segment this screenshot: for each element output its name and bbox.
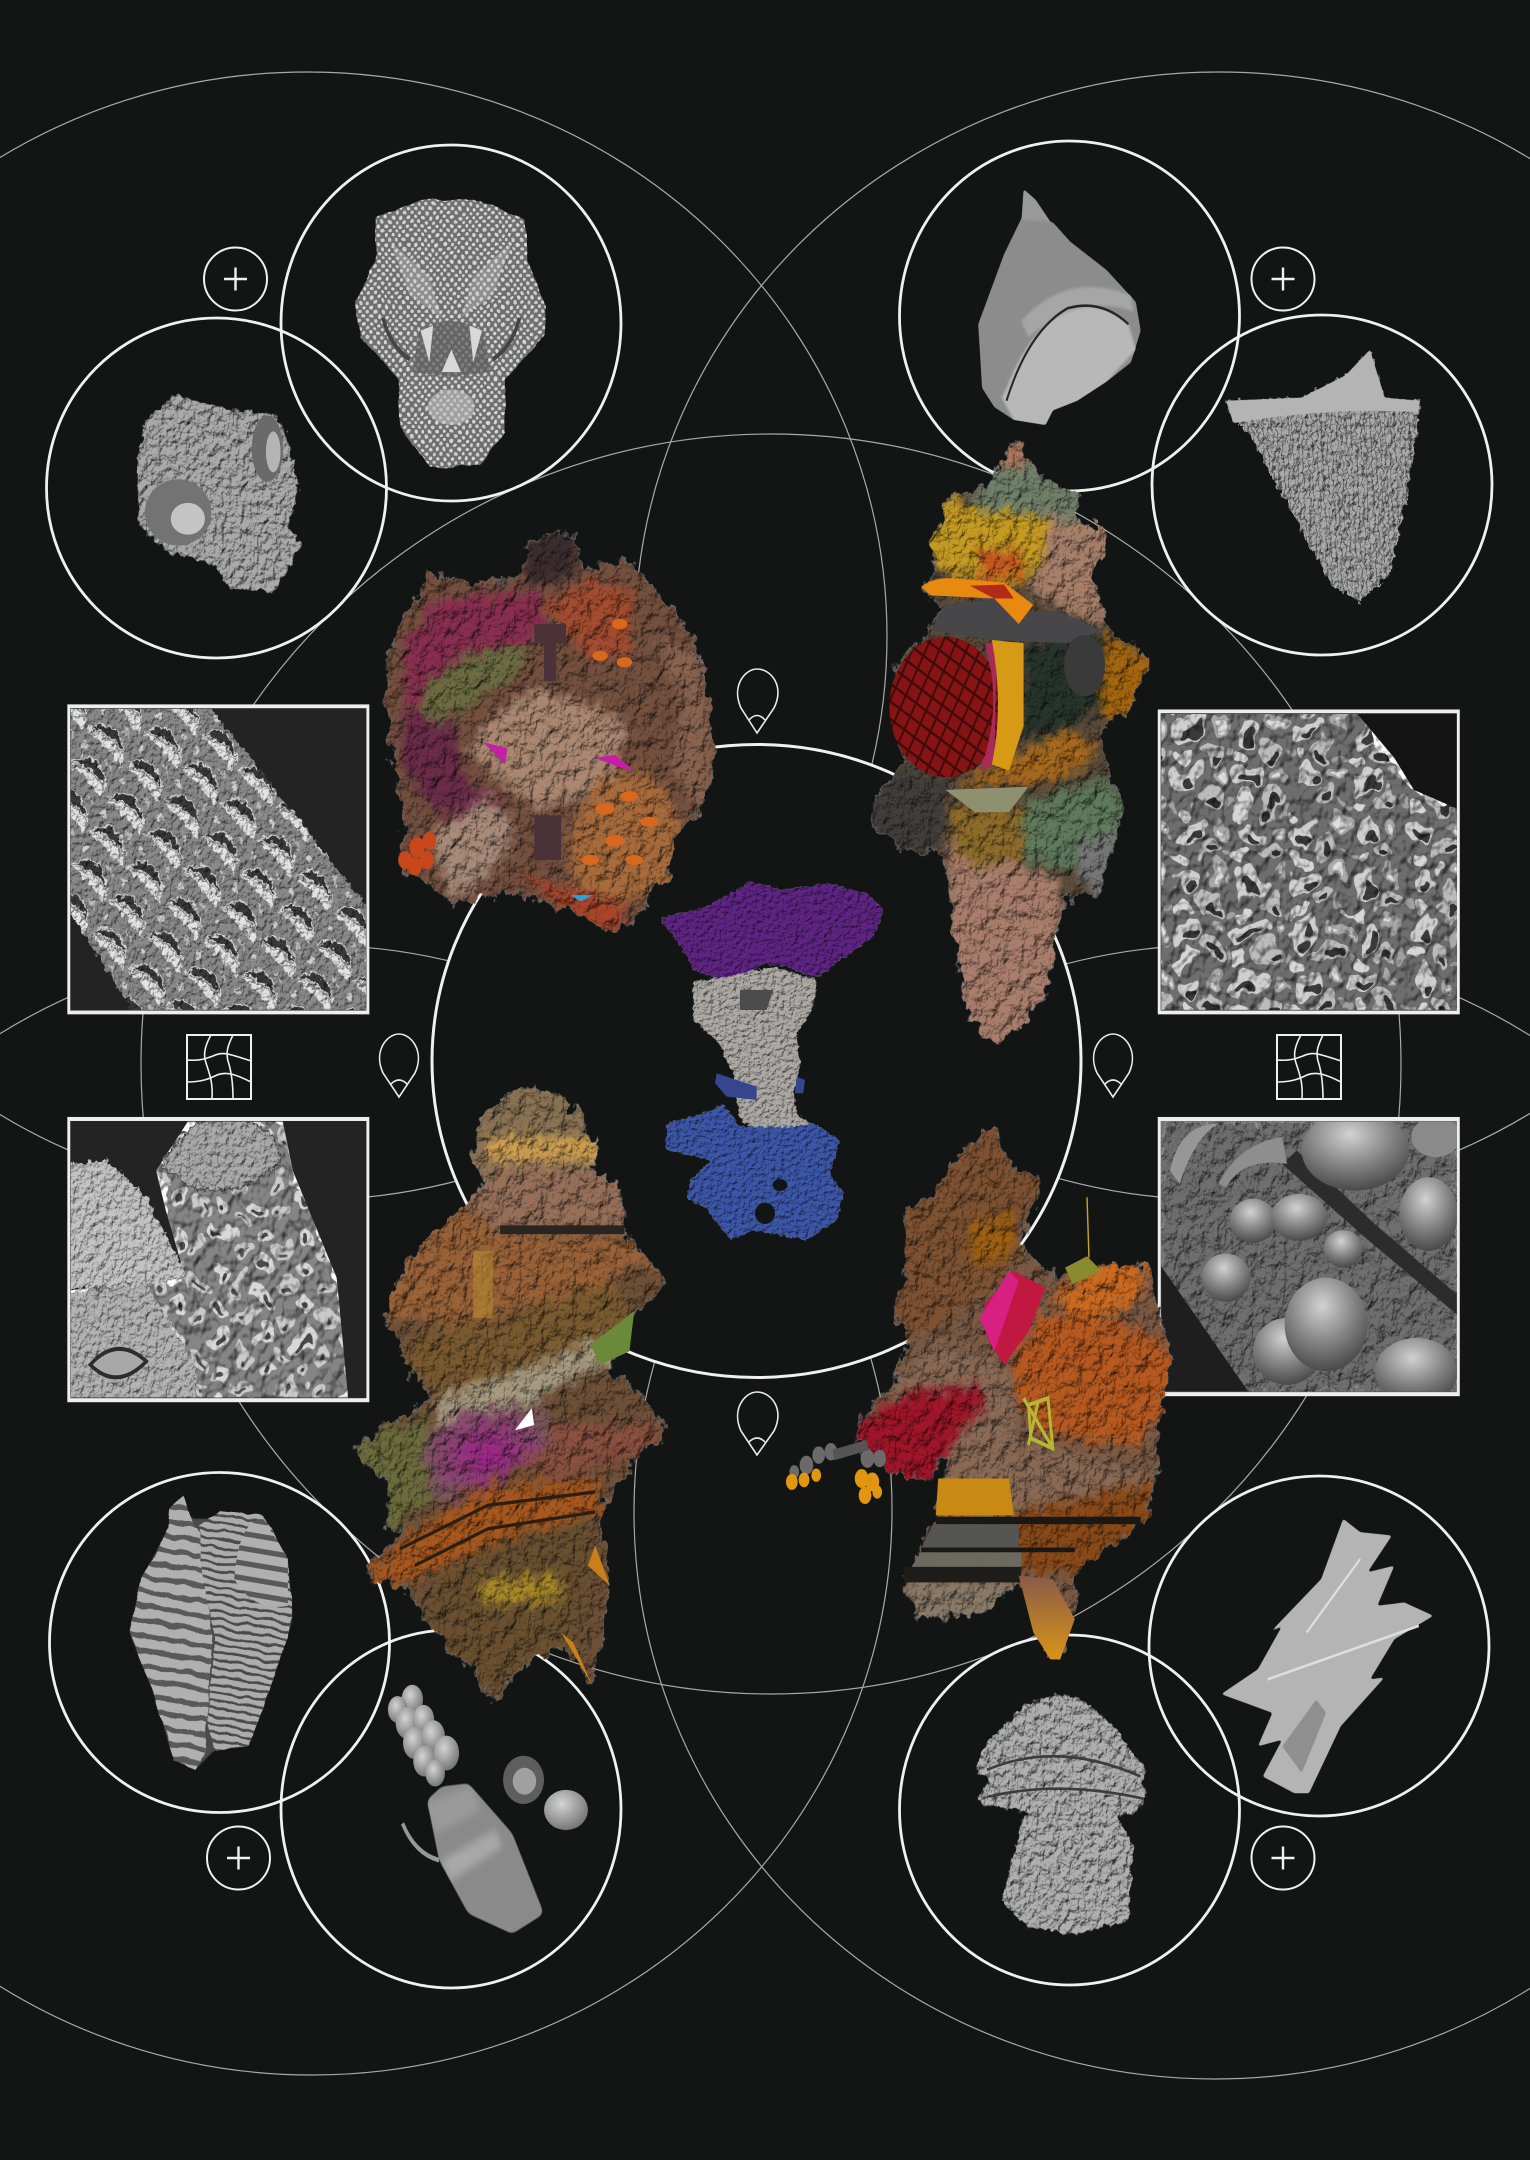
icon: plus bottom left bbox=[207, 1826, 270, 1890]
grey core bbox=[693, 967, 817, 1133]
nodule mass bbox=[63, 1110, 349, 1405]
icon: plus bottom right bbox=[1252, 1826, 1314, 1890]
icon: teardrop left bbox=[380, 1034, 418, 1097]
inset panel: spiked scales bbox=[67, 704, 370, 1014]
icon: teardrop bottom bbox=[738, 1392, 778, 1455]
icon: teardrop right bbox=[1094, 1034, 1132, 1097]
icon: teardrop top bbox=[738, 669, 778, 733]
head ring bbox=[161, 1117, 281, 1191]
creature: centre stacked form bbox=[660, 882, 883, 1240]
eye shape bbox=[90, 1349, 146, 1377]
specimen: conical shell bbox=[978, 189, 1141, 425]
base holes bbox=[755, 1179, 787, 1224]
mottled skin bbox=[1161, 1122, 1457, 1391]
icon: warped grid right bbox=[1277, 1035, 1341, 1099]
creature: top left composite bbox=[385, 532, 715, 937]
specimen: ribbed shell bbox=[129, 1495, 293, 1770]
dark fold bbox=[1282, 1150, 1457, 1314]
specimen: wrinkled blob bbox=[137, 394, 302, 592]
clusters of bubbles bbox=[789, 1443, 886, 1479]
blue base bbox=[667, 1105, 843, 1240]
creature: bottom left composite bbox=[354, 1083, 668, 1703]
specimen: mushroom shape bbox=[975, 1694, 1148, 1934]
creature: bottom right composite bbox=[786, 1125, 1172, 1659]
bulbs bbox=[1170, 1110, 1460, 1405]
inset panel: smooth bulbs bbox=[1150, 1110, 1460, 1405]
blue band bbox=[715, 1073, 805, 1100]
specimen: spiky ribbons bbox=[1221, 1519, 1433, 1793]
core shadow bbox=[740, 990, 773, 1010]
specimen: scaled dragon head bbox=[355, 200, 546, 468]
inset panel: bumpy surface bbox=[1158, 710, 1460, 1014]
specimen: larva with bubbles bbox=[388, 1685, 588, 1934]
purple crown bbox=[660, 882, 883, 982]
icon: warped grid left bbox=[187, 1035, 251, 1099]
dark corner bbox=[1161, 1266, 1248, 1392]
creature: top right composite bbox=[867, 435, 1150, 1042]
icon: plus top left bbox=[204, 248, 267, 310]
lower left mound bbox=[63, 1284, 195, 1405]
central white circle bbox=[432, 744, 1081, 1378]
icon: plus top right bbox=[1252, 248, 1314, 310]
specimen: ridged funnel bbox=[1226, 350, 1420, 602]
inset panel: nodules and cone bbox=[63, 1110, 368, 1405]
cone bbox=[63, 1160, 188, 1290]
